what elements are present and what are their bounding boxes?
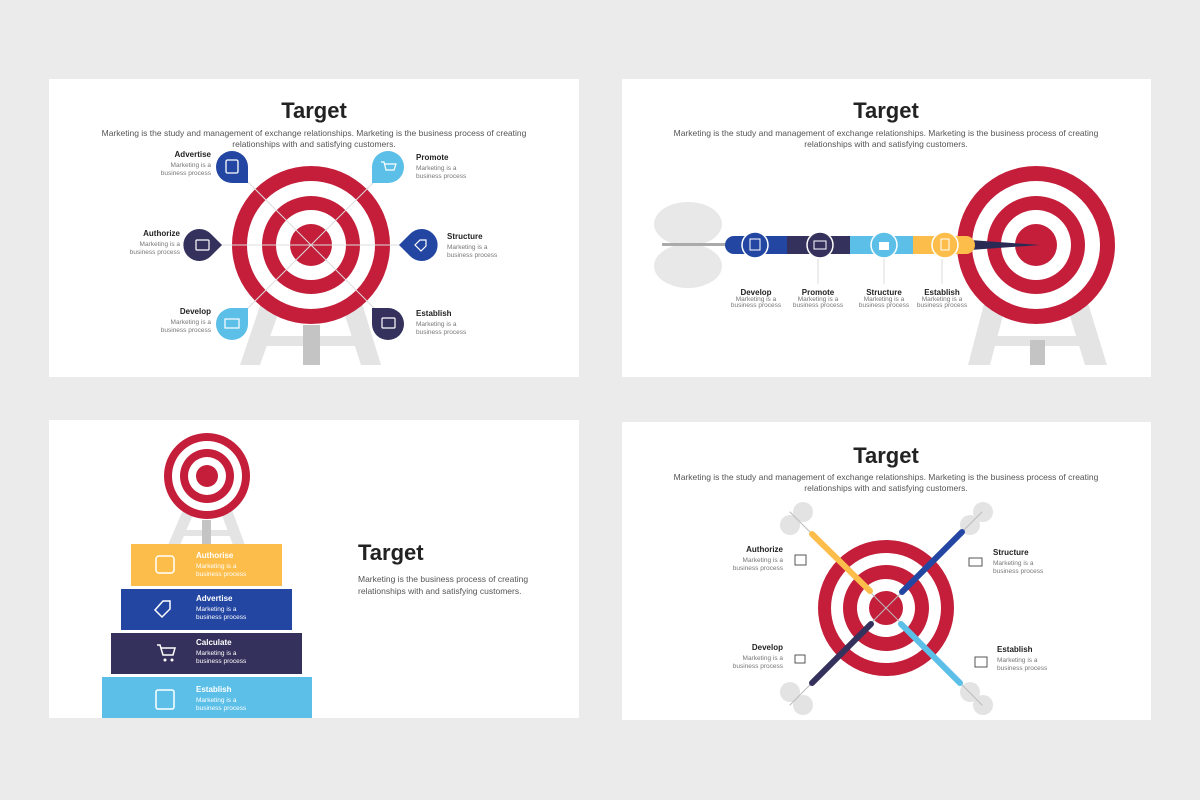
- step: Structure: Structure: [866, 288, 902, 297]
- step: Authorise: business process: [196, 571, 247, 578]
- step: Establish: Marketing is a: [922, 296, 963, 303]
- panel: radial target (top-left): [49, 79, 579, 377]
- step: Structure: business process: [859, 302, 910, 309]
- step: Structure: [859, 232, 910, 309]
- target board: [218, 166, 404, 324]
- label: Establish: Establish: [997, 645, 1033, 654]
- label: Authorize: Authorize: [746, 545, 784, 554]
- pin: Establish: Marketing is a: [416, 321, 457, 328]
- description: relationships with and satisfying customers.: [232, 139, 396, 149]
- step: Establish: Establish: [196, 685, 232, 694]
- step: Calculate: Calculate: [196, 638, 232, 647]
- pin: Structure: business process: [447, 252, 498, 259]
- target board: [957, 166, 1115, 324]
- pin: Advertise: business process: [161, 170, 212, 177]
- description: Marketing is the business process of creating: [358, 574, 528, 584]
- step: Establish: Marketing is a: [196, 697, 237, 704]
- step: Promote: Promote: [802, 288, 835, 297]
- pin: Establish: business process: [416, 329, 467, 336]
- panel: crossed darts (bottom-right): [622, 422, 1151, 720]
- step: Structure: Marketing is a: [864, 296, 905, 303]
- label: Structure: [969, 548, 1044, 575]
- pin: Develop: Marketing is a: [171, 319, 211, 326]
- step: Develop: Develop: [740, 288, 772, 297]
- title: Target: [853, 98, 919, 123]
- step: Develop: [731, 232, 782, 309]
- pin: Authorize: [130, 229, 222, 261]
- pin: Develop: business process: [161, 327, 212, 334]
- pin: Advertise: Advertise: [175, 150, 212, 159]
- label: Develop: Marketing is a: [743, 655, 783, 662]
- pin: Authorize: Authorize: [143, 229, 181, 238]
- step: Calculate: business process: [196, 658, 247, 665]
- label: Establish: Marketing is a: [997, 657, 1038, 664]
- pin: Structure: Marketing is a: [447, 244, 488, 251]
- stand: [968, 300, 1107, 365]
- target board: [164, 433, 250, 519]
- step: Authorise: [131, 544, 282, 586]
- step: Establish: [917, 232, 968, 309]
- step: Calculate: Marketing is a: [196, 650, 237, 657]
- pin: Develop: Develop: [180, 307, 211, 316]
- label: Authorize: Marketing is a: [743, 557, 783, 564]
- label: Authorize: business process: [733, 565, 784, 572]
- step: Promote: [793, 232, 844, 309]
- label: Structure: Marketing is a: [993, 560, 1034, 567]
- step: Establish: business process: [196, 705, 247, 712]
- step: Develop: Marketing is a: [736, 296, 777, 303]
- pin: Promote: business process: [416, 173, 467, 180]
- label: Structure: business process: [993, 568, 1044, 575]
- pin: Promote: Marketing is a: [416, 165, 457, 172]
- panel: dart timeline (top-right): [622, 79, 1151, 377]
- pin: Advertise: Marketing is a: [171, 162, 211, 169]
- pin: Promote: Promote: [416, 153, 449, 162]
- title: Target: [281, 98, 347, 123]
- description: relationships with and satisfying customers.: [358, 586, 521, 596]
- label: Structure: Structure: [993, 548, 1029, 557]
- pin: Establish: Establish: [416, 309, 452, 318]
- step: Authorise: Marketing is a: [196, 563, 237, 570]
- dart: [654, 202, 1040, 288]
- darts: [780, 502, 993, 715]
- step: Calculate: [111, 633, 302, 674]
- step: Promote: Marketing is a: [798, 296, 839, 303]
- label: Establish: [975, 645, 1048, 672]
- step: Promote: business process: [793, 302, 844, 309]
- pin: Authorize: Marketing is a: [140, 241, 180, 248]
- pin: Structure: [399, 229, 498, 261]
- panel: stacked steps (bottom-left): [49, 420, 579, 718]
- pin: Structure: Structure: [447, 232, 483, 241]
- stand: [168, 510, 245, 545]
- description: Marketing is the study and management of exchange relationships. Marketing is the business process of creating: [102, 128, 526, 138]
- description: relationships with and satisfying customers.: [804, 483, 968, 493]
- title: Target: [358, 540, 424, 565]
- pin: Promote: [372, 151, 467, 183]
- label: Develop: Develop: [752, 643, 783, 652]
- step: Establish: [102, 677, 312, 718]
- title: Target: [853, 443, 919, 468]
- pin: Advertise: [161, 150, 248, 183]
- description: relationships with and satisfying customers.: [804, 139, 968, 149]
- description: Marketing is the study and management of exchange relationships. Marketing is the business process of creating: [674, 128, 1098, 138]
- step: Develop: business process: [731, 302, 782, 309]
- label: Develop: [733, 643, 805, 670]
- pin: Develop: [161, 307, 248, 340]
- step: Establish: Establish: [924, 288, 960, 297]
- step: Advertise: Marketing is a: [196, 606, 237, 613]
- step: Advertise: Advertise: [196, 594, 233, 603]
- pin: Establish: [372, 308, 467, 340]
- label: Authorize: [733, 545, 806, 572]
- stand: [240, 300, 381, 365]
- step: Authorise: Authorise: [196, 551, 234, 560]
- step: Establish: business process: [917, 302, 968, 309]
- target board: [818, 540, 954, 676]
- label: Establish: business process: [997, 665, 1048, 672]
- step: Advertise: [121, 589, 292, 630]
- label: Develop: business process: [733, 663, 784, 670]
- pin: Authorize: business process: [130, 249, 181, 256]
- step: Advertise: business process: [196, 614, 247, 621]
- description: Marketing is the study and management of exchange relationships. Marketing is the business process of creating: [674, 472, 1098, 482]
